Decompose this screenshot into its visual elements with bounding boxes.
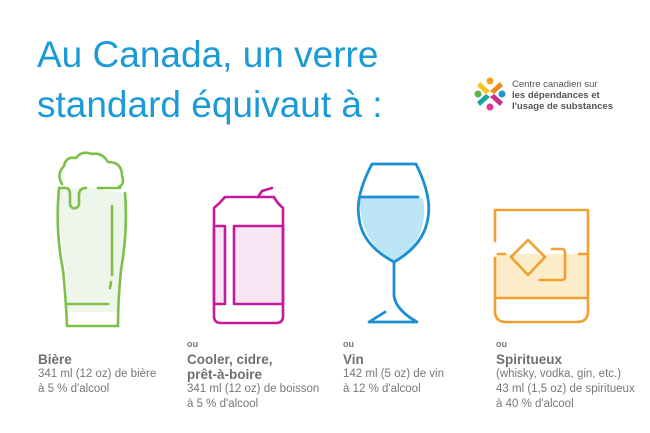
text: spirits: 43 ml (1,5 oz) de spiritueux [496,383,635,395]
text: spirits: Spiritueux [496,352,562,367]
logo text: l'usage de substances [512,101,613,112]
text: beer: 341 ml (12 oz) de bière [38,368,156,380]
icon: can [212,186,284,324]
text: cooler: ou [187,339,198,349]
icon: beer glass [56,151,128,328]
text: wine: à 12 % d'alcool [343,383,421,395]
text: wine: 142 ml (5 oz) de vin [343,368,444,380]
icon: logo mark [474,78,506,110]
text: cooler: prêt-à-boire [187,367,262,382]
text: wine: Vin [343,352,364,367]
logo [474,78,613,112]
text: spirits: à 40 % d'alcool [496,398,574,410]
logo text [512,79,613,112]
text: spirits: ou [496,339,507,349]
title: standard équivaut à : [37,84,383,125]
text: spirits [496,339,635,410]
icon: wine glass [356,162,430,324]
text: beer: à 5 % d'alcool [38,383,109,395]
logo text: Centre canadien sur [512,79,598,90]
text: wine [343,339,444,395]
title [37,34,383,125]
text: beer [38,352,156,395]
text: cooler: Cooler, cidre, [187,352,273,367]
text: cooler [187,339,319,410]
text: wine: ou [343,339,354,349]
title: Au Canada, un verre [37,34,378,75]
text: cooler: 341 ml (12 oz) de boisson [187,383,319,395]
icon: rocks glass [494,208,590,324]
text: beer: Bière [38,352,72,367]
logo text: les dépendances et [512,90,600,101]
text: spirits: (whisky, vodka, gin, etc.) [496,368,621,380]
text: cooler: à 5 % d'alcool [187,398,258,410]
